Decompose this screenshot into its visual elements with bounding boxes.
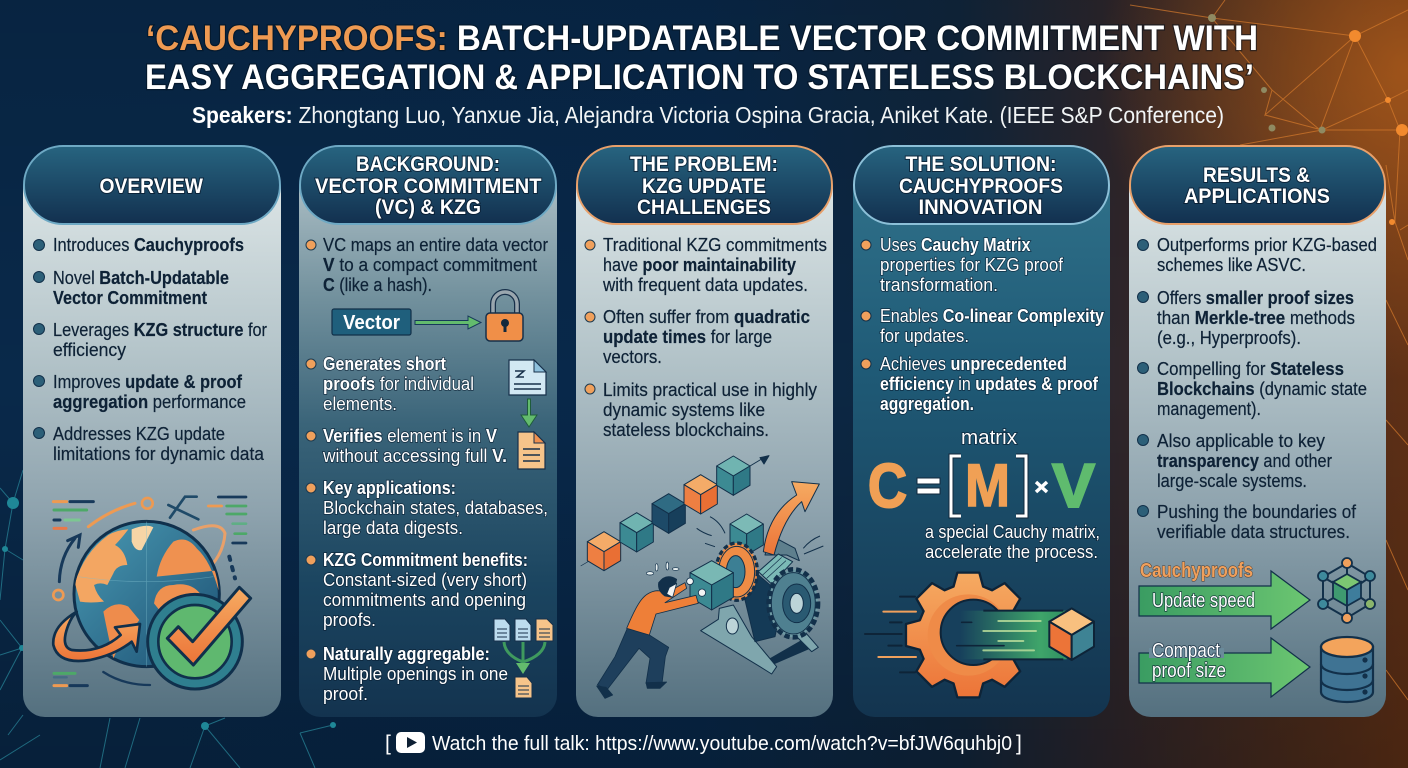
header: background: (VC) & KZG <box>375 196 481 219</box>
bullets: background: without accessing full V. <box>322 445 507 466</box>
bullets: the solution: efficiency in updates & proof <box>880 373 1099 394</box>
bullets: the problem: stateless blockchains. <box>603 419 769 440</box>
icon: proof document to document <box>509 360 546 469</box>
diagram: vector to lock: Vector <box>343 312 400 334</box>
header: results: APPLICATIONS <box>1184 185 1330 208</box>
header: the solution: CAUCHYPROOFS <box>899 175 1063 198</box>
bullets: background <box>306 234 548 704</box>
formula: C = [M] x V: matrix <box>961 427 1017 449</box>
bullets: results <box>1138 234 1377 542</box>
bullets: background: large data digests. <box>323 517 463 538</box>
bullets: results: large-scale systems. <box>1157 470 1307 491</box>
icon: hexagonal cube network <box>1318 558 1375 623</box>
formula: C = [M] x V: M <box>965 452 1010 519</box>
header: background: BACKGROUND: <box>356 153 500 176</box>
header: overview <box>24 146 280 224</box>
bullets: background: proof. <box>323 683 368 704</box>
panel: the problem <box>576 146 833 717</box>
panel: the solution <box>853 146 1110 717</box>
title: EASY AGGREGATION & APPLICATION TO STATELESS BLOCKCHAINS’ <box>145 58 1254 97</box>
icon: aggregated documents <box>494 619 553 698</box>
header: the problem: KZG UPDATE <box>642 175 766 198</box>
header: results <box>1130 146 1385 224</box>
bullets: results: management). <box>1157 398 1261 419</box>
bullets: the problem: Often suffer from quadratic <box>603 306 810 327</box>
icon: play button <box>396 732 425 753</box>
bullets: overview: Introduces Cauchyproofs <box>53 234 244 255</box>
bullets: background: proofs for individual <box>323 373 474 394</box>
bullets: background: Blockchain states, databases, <box>323 497 548 518</box>
footer link: ] <box>1016 732 1022 755</box>
bullets: the problem <box>585 234 827 440</box>
bullets: background: V to a compact commitment <box>323 254 537 275</box>
bullets: overview: Novel Batch-Updatable <box>53 267 229 288</box>
bullets: results: schemes like ASVC. <box>1157 254 1306 275</box>
header: the problem: THE PROBLEM: <box>630 153 778 176</box>
footer link: Watch the full talk: https://www.youtube.com/watch?v=bfJW6quhbj0 <box>432 733 1012 755</box>
icon: globe with check badge <box>53 497 251 689</box>
bullets: results: Pushing the boundaries of <box>1157 501 1357 522</box>
chart: cauchyproofs comparison arrows: Compact <box>1152 640 1220 662</box>
bullets: the solution: properties for KZG proof <box>880 254 1064 275</box>
icon: gear accelerating cube <box>865 573 1094 697</box>
bullets: overview: aggregation performance <box>53 391 246 412</box>
bullets: results: Offers smaller proof sizes <box>1157 287 1354 308</box>
bullets: results: (e.g., Hyperproofs). <box>1157 327 1301 348</box>
panel: results and applications <box>1129 146 1386 717</box>
bullets: overview <box>34 234 267 464</box>
header: background: VECTOR COMMITMENT <box>315 175 542 198</box>
person pushing <box>597 577 706 698</box>
bullets: background: KZG Commitment benefits: <box>323 549 528 570</box>
bullets: overview: Leverages KZG structure for <box>53 319 267 340</box>
header: the solution: INNOVATION <box>918 196 1042 219</box>
chart: cauchyproofs comparison arrows: Update speed <box>1152 590 1255 612</box>
bullets: the solution: for updates. <box>880 325 969 346</box>
bullets: results: verifiable data structures. <box>1157 521 1350 542</box>
bullets: the solution: transformation. <box>880 274 998 295</box>
formula: C = [M] x V <box>868 427 1100 562</box>
bullets: background: proofs. <box>323 609 376 630</box>
panel: overview <box>23 146 281 717</box>
bullets: results: Blockchains (dynamic state <box>1157 378 1367 399</box>
header: the solution <box>854 146 1109 224</box>
header: the problem: CHALLENGES <box>637 196 771 219</box>
machine with gears <box>690 482 819 674</box>
bullets: the solution: Uses Cauchy Matrix <box>880 234 1031 255</box>
formula: C = [M] x V: accelerate the process. <box>925 541 1098 562</box>
icon: database <box>1321 637 1373 702</box>
bullets: the problem: have poor maintainability <box>603 254 797 275</box>
bullets: background: Constant-sized (very short) <box>323 569 527 590</box>
bullets: the solution: Enables Co-linear Complexity <box>880 305 1105 326</box>
bullets: overview: Vector Commitment <box>53 287 207 308</box>
bullets: the solution: aggregation. <box>880 393 974 414</box>
chart: cauchyproofs comparison arrows: proof size <box>1152 660 1226 682</box>
title <box>145 19 1258 97</box>
bullets: overview: Improves update & proof <box>53 371 243 392</box>
bullets: results: Compelling for Stateless <box>1157 358 1344 379</box>
chain of cubes <box>581 456 769 571</box>
bullets: results: than Merkle-tree methods <box>1157 307 1355 328</box>
bullets: background: Key applications: <box>323 477 456 498</box>
speakers line: Speakers: Zhongtang Luo, Yanxue Jia, Alejandra Victoria Ospina Gracia, Aniket Kate. (IEEE S&P Conference) <box>192 102 1224 128</box>
bullets: the solution <box>861 234 1105 414</box>
formula: C = [M] x V: C <box>868 452 907 521</box>
bullets: background: commitments and opening <box>323 589 526 610</box>
bullets: overview: limitations for dynamic data <box>53 443 265 464</box>
header: the problem <box>577 146 832 224</box>
bullets: overview: efficiency <box>53 339 127 360</box>
bullets: the problem: dynamic systems like <box>603 399 765 420</box>
bullets: results: transparency and other <box>1157 450 1332 471</box>
formula: C = [M] x V: V <box>1052 452 1095 521</box>
bullets: background: Generates short <box>323 353 446 374</box>
bullets: background: elements. <box>323 393 397 414</box>
bullets: background: Verifies element is in V <box>323 425 498 446</box>
bullets: background: VC maps an entire data vector <box>323 234 548 255</box>
chart: cauchyproofs comparison arrows: Cauchyproofs <box>1140 560 1253 582</box>
bullets: background: Multiple openings in one <box>323 663 508 684</box>
bullets: background: Naturally aggregable: <box>323 643 490 664</box>
bullets: the problem: with frequent data updates. <box>602 274 808 295</box>
header: results: RESULTS & <box>1203 164 1310 187</box>
chart: cauchyproofs comparison arrows <box>1139 560 1310 697</box>
header: the solution: THE SOLUTION: <box>906 153 1056 176</box>
diagram: vector to lock <box>332 292 523 341</box>
bullets: results: Also applicable to key <box>1157 430 1326 451</box>
panel: background <box>299 146 557 717</box>
formula: C = [M] x V: a special Cauchy matrix, <box>925 521 1100 542</box>
bullets: the problem: Traditional KZG commitments <box>603 234 827 255</box>
bullets: results: Outperforms prior KZG-based <box>1157 234 1377 255</box>
footer link: [ <box>385 732 391 755</box>
title: ‘CAUCHYPROOFS: BATCH-UPDATABLE VECTOR COMMITMENT WITH <box>146 19 1258 58</box>
bullets: the problem: update times for large <box>603 326 772 347</box>
bullets: overview: Addresses KZG update <box>53 423 225 444</box>
bullets: the problem: Limits practical use in highly <box>603 379 818 400</box>
bullets: the solution: Achieves unprecedented <box>880 353 1067 374</box>
bullets: background: C (like a hash). <box>323 274 432 295</box>
bullets: the problem: vectors. <box>603 346 662 367</box>
header: background <box>300 146 556 224</box>
header: overview: OVERVIEW <box>100 175 203 198</box>
illustration: cube chain and person pushing cube into gears <box>581 456 823 698</box>
